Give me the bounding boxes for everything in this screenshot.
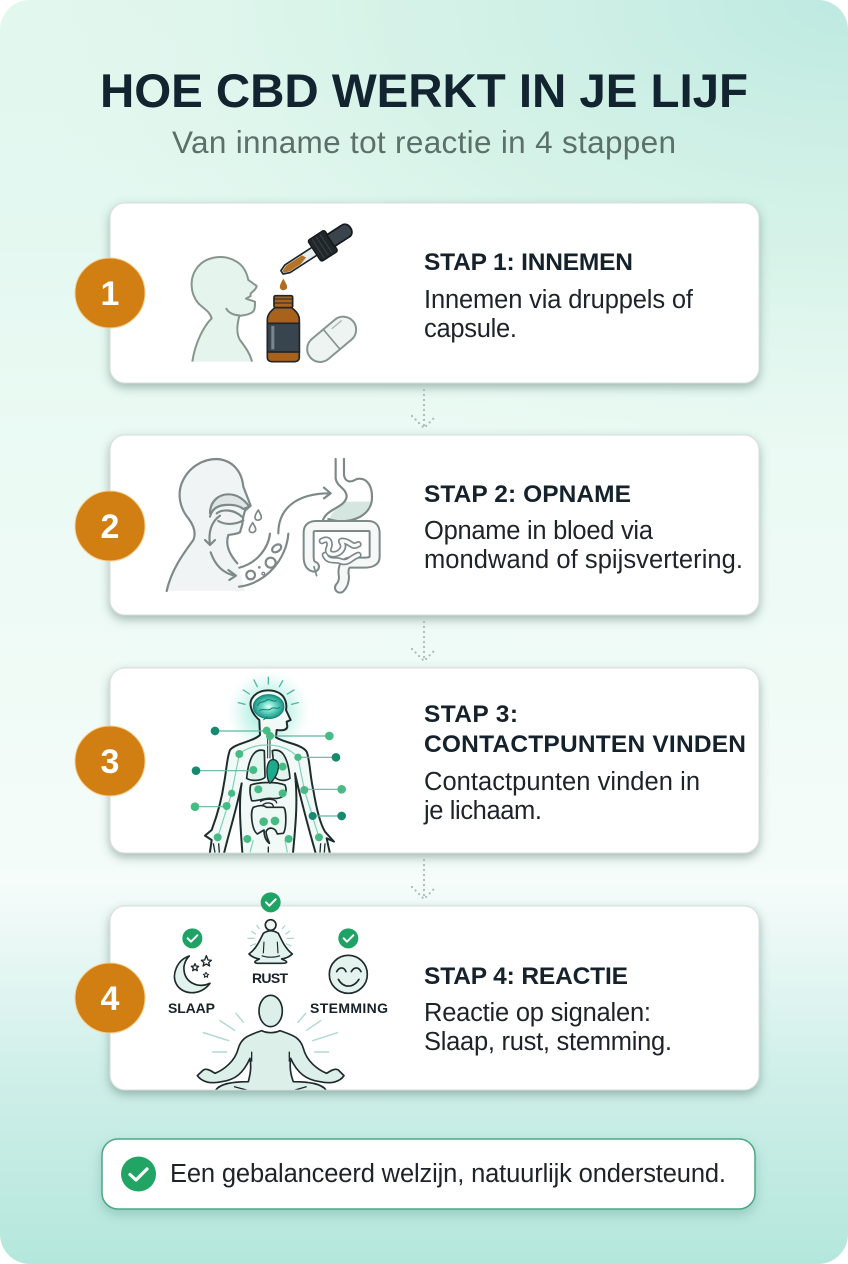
icon: seated figure (rest) — [247, 920, 294, 963]
step 3 heading — [424, 701, 746, 758]
step number 1 — [75, 258, 145, 328]
step number 4 — [75, 963, 145, 1033]
step 4 heading: STAP 4: REACTIE — [424, 963, 628, 990]
label: slaap: SLAAP — [168, 1000, 215, 1016]
step 3 heading: STAP 3: — [424, 701, 518, 728]
step 3 heading: CONTACTPUNTEN VINDEN — [424, 731, 746, 758]
step 3 text: je lichaam. — [423, 797, 542, 825]
panel: step 4 — [75, 892, 759, 1093]
title: HOE CBD WERKT IN JE LIJF — [100, 65, 748, 118]
icon: absorption via mouth and digestion — [167, 459, 375, 591]
step number 3 — [75, 726, 145, 796]
icon: check — [121, 1156, 156, 1192]
step 2 text — [424, 517, 743, 574]
step 1 heading: STAP 1: INNEMEN — [424, 249, 633, 276]
icon: smiley — [329, 955, 367, 993]
step number 2 — [75, 491, 145, 561]
subtitle: Van inname tot reactie in 4 stappen — [172, 124, 676, 160]
step 1 text: Innemen via druppels of — [424, 286, 694, 314]
step number 2: 2 — [101, 508, 119, 546]
step number 3: 3 — [101, 743, 119, 781]
step 1 text — [424, 286, 694, 343]
icon: head, dropper, bottle and capsule — [192, 217, 361, 367]
icon: check badges — [182, 892, 358, 948]
step 2 heading: STAP 2: OPNAME — [424, 481, 631, 508]
panel: step 1 — [75, 203, 759, 383]
panel: step 2 — [75, 435, 759, 615]
step 1 text: capsule. — [424, 315, 517, 343]
arrow: step 2 to 3 — [412, 622, 436, 662]
step 3 text — [423, 768, 700, 825]
callout text: Een gebalanceerd welzijn, natuurlijk ondersteund. — [170, 1160, 726, 1188]
step number 1: 1 — [101, 275, 119, 313]
step 4 text: Reactie op signalen: — [424, 999, 651, 1027]
callout: conclusion — [102, 1139, 755, 1209]
arrow: step 1 to 2 — [412, 390, 436, 428]
step 2 text: mondwand of spijsvertering. — [424, 546, 743, 574]
panel: step 3 — [75, 668, 759, 857]
icon: body with contact points — [191, 670, 346, 857]
label: rust: RUST — [252, 970, 288, 986]
step 4 text: Slaap, rust, stemming. — [424, 1028, 672, 1056]
step 3 text: Contactpunten vinden in — [424, 768, 700, 796]
step 4 text — [424, 999, 672, 1056]
label: stemming: STEMMING — [310, 1000, 388, 1016]
icon: sleep, rest, mood and meditating figure — [174, 892, 367, 1093]
icon: large meditating figure — [197, 995, 344, 1093]
icon: moon and stars — [174, 956, 211, 993]
step number 4: 4 — [101, 980, 120, 1018]
arrow: step 3 to 4 — [412, 860, 436, 899]
step 2 text: Opname in bloed via — [424, 517, 654, 545]
